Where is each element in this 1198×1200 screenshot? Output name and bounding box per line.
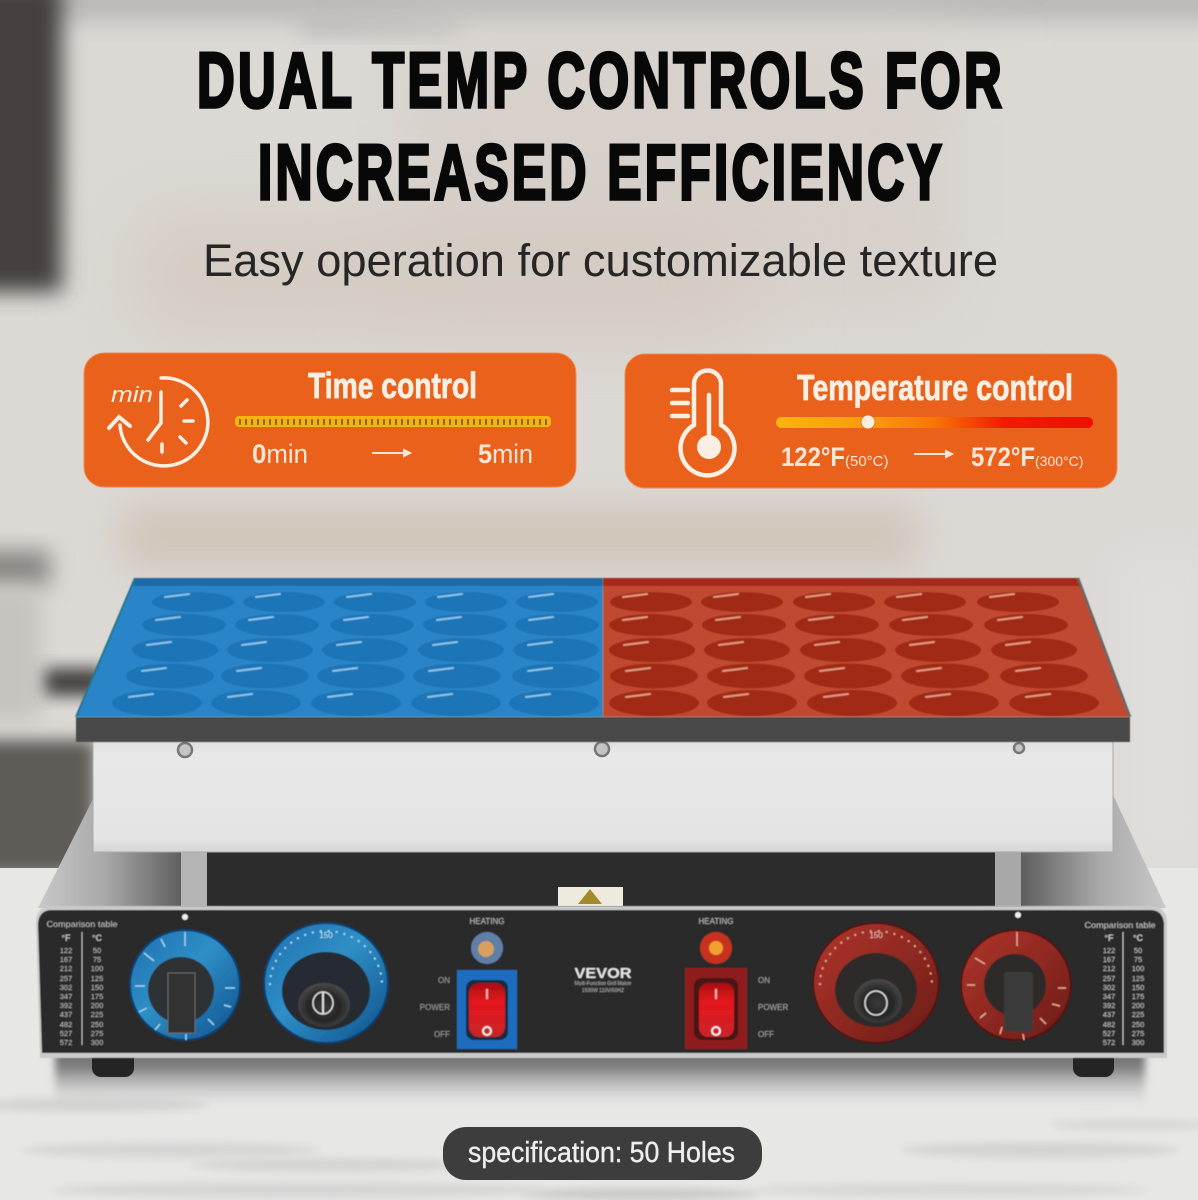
- specification pill: specification: 50 Holes: [468, 1137, 735, 1169]
- right comparison table: [1084, 920, 1156, 1047]
- temperature gradient slider: [776, 415, 1093, 429]
- right comparison table: °C: [1133, 933, 1144, 943]
- left comparison table: 50: [93, 946, 101, 955]
- red heating lamp: [699, 917, 733, 964]
- subtitle: Easy operation for customizable texture: [203, 235, 998, 286]
- blue switch labels: OFF: [434, 1030, 450, 1039]
- brand logo: Multi-Function Grill Maker: [575, 981, 632, 987]
- red power switch: [685, 968, 747, 1049]
- griddle body: [93, 741, 1113, 852]
- left comparison table: [46, 919, 118, 1047]
- left comparison table: 347: [60, 992, 72, 1001]
- temperature range start: 122°F(50°C): [781, 442, 889, 472]
- left comparison table: 302: [60, 983, 72, 992]
- left comparison table: 150: [91, 983, 103, 992]
- brand logo: VEVOR: [574, 965, 632, 982]
- marble counter: [0, 868, 1198, 1200]
- right comparison table: 200: [1132, 1001, 1144, 1010]
- red heating lamp: HEATING: [699, 917, 733, 926]
- brand logo: [574, 965, 632, 994]
- screws: [178, 742, 1024, 757]
- left comparison table: 437: [60, 1010, 72, 1019]
- icon: clock with min arrow: [109, 378, 208, 466]
- left comparison table: 572: [60, 1038, 72, 1047]
- right comparison table: 275: [1132, 1029, 1144, 1038]
- right comparison table: 572: [1103, 1038, 1115, 1047]
- left comparison table: 212: [60, 964, 72, 973]
- icon: thermometer: [672, 370, 734, 475]
- right comparison table: 100: [1132, 964, 1144, 973]
- red time dial: [961, 930, 1071, 1040]
- left comparison table: 275: [91, 1029, 103, 1038]
- right comparison table: 167: [1103, 955, 1115, 964]
- left comparison table: 257: [60, 974, 72, 983]
- right comparison table: 122: [1103, 946, 1115, 955]
- left comparison table: 392: [60, 1001, 72, 1010]
- right comparison table: 50: [1134, 946, 1142, 955]
- right comparison table: 300: [1132, 1038, 1144, 1047]
- right comparison table: 175: [1132, 992, 1144, 1001]
- right comparison table: 250: [1132, 1020, 1144, 1029]
- left comparison table: 482: [60, 1020, 72, 1029]
- time range end: 5min: [478, 439, 533, 469]
- blue temperature dial: [264, 923, 388, 1043]
- panel: time control: [84, 353, 576, 487]
- specification pill: [443, 1127, 762, 1180]
- blue switch labels: POWER: [420, 1003, 450, 1012]
- blue holes: [112, 592, 600, 716]
- indicator dots: [182, 912, 1021, 920]
- blue power switch: [457, 970, 517, 1049]
- blue switch labels: [420, 976, 450, 1039]
- right comparison table: 482: [1103, 1020, 1115, 1029]
- left comparison table: 125: [91, 974, 103, 983]
- control panel: [36, 906, 1167, 1058]
- blue hole highlights: [129, 594, 553, 697]
- right comparison table: 212: [1103, 964, 1115, 973]
- feet: [92, 1050, 1114, 1077]
- left comparison table: 200: [91, 1001, 103, 1010]
- left comparison table: 527: [60, 1029, 72, 1038]
- right comparison table: 527: [1103, 1029, 1115, 1038]
- red temperature dial: [813, 923, 939, 1043]
- right comparison table: °F: [1104, 933, 1114, 943]
- griddle plate: blue side: [76, 578, 603, 717]
- red switch labels: POWER: [758, 1003, 788, 1012]
- right comparison table: 257: [1103, 974, 1115, 983]
- griddle plate: red side: [603, 578, 1130, 717]
- panel: temperature control: [625, 354, 1117, 488]
- right comparison table: 392: [1103, 1001, 1115, 1010]
- red switch labels: ON: [758, 976, 770, 985]
- left comparison table: 300: [91, 1038, 103, 1047]
- arrow: [914, 451, 952, 457]
- blue switch labels: ON: [438, 976, 450, 985]
- griddle machine: [36, 578, 1167, 1077]
- right comparison table: 75: [1134, 955, 1142, 964]
- icon: clock with min arrow: min: [111, 382, 153, 407]
- warning sticker: [558, 887, 623, 906]
- right comparison table: 437: [1103, 1010, 1115, 1019]
- blue temperature dial: 150: [319, 931, 333, 940]
- blue heating lamp: [470, 917, 504, 964]
- left comparison table: °C: [92, 933, 103, 943]
- blue time dial: [130, 930, 240, 1040]
- left comparison table: 75: [93, 955, 101, 964]
- arrow: [372, 450, 410, 456]
- left comparison table: 100: [91, 964, 103, 973]
- time range start: 0min: [252, 439, 308, 469]
- heading: temperature control: Temperature control: [797, 367, 1073, 408]
- right comparison table: 347: [1103, 992, 1115, 1001]
- stainless base: [38, 795, 1166, 908]
- time ruler bar: [235, 416, 551, 427]
- red temperature dial: 150: [869, 931, 883, 940]
- red switch labels: OFF: [758, 1030, 774, 1039]
- red holes: [609, 592, 1099, 716]
- red hole highlights: [623, 594, 1050, 697]
- brand logo: 1500W 110V/60HZ: [582, 988, 624, 994]
- red switch labels: [758, 976, 788, 1039]
- heading: time control: Time control: [308, 365, 477, 406]
- right comparison table: 302: [1103, 983, 1115, 992]
- left comparison table: 250: [91, 1020, 103, 1029]
- left comparison table: °F: [61, 933, 71, 943]
- right comparison table: 225: [1132, 1010, 1144, 1019]
- temperature range end: 572°F(300°C): [971, 442, 1083, 472]
- left comparison table: Comparison table: [46, 919, 118, 929]
- left comparison table: 122: [60, 946, 72, 955]
- left comparison table: 225: [91, 1010, 103, 1019]
- title: [197, 36, 1005, 216]
- right comparison table: 125: [1132, 974, 1144, 983]
- left comparison table: 175: [91, 992, 103, 1001]
- griddle front edge: [76, 717, 1130, 742]
- right comparison table: 150: [1132, 983, 1144, 992]
- left comparison table: 167: [60, 955, 72, 964]
- right comparison table: Comparison table: [1084, 920, 1156, 930]
- blue heating lamp: HEATING: [470, 917, 504, 926]
